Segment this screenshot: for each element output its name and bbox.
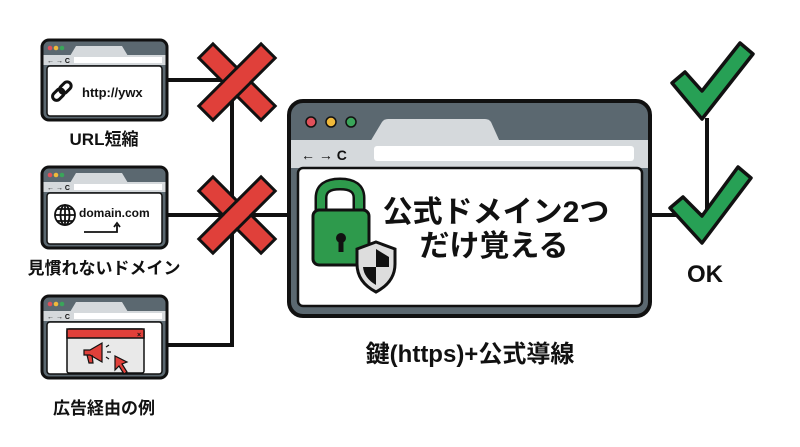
panel: main browser	[289, 101, 650, 316]
label: URL短縮: URL短縮	[70, 130, 138, 149]
panel: main browser: ← → C	[301, 147, 347, 163]
label: OK: OK	[687, 261, 724, 288]
icon: red X middle	[175, 153, 299, 277]
panel: ad browser: ← → C	[47, 314, 70, 321]
panel: main browser: だけ覚える	[419, 230, 569, 263]
icon: ad popup: ×	[137, 332, 141, 339]
text: 公式ドメイン2つだけ覚える: 公式ドメイン2つ	[383, 196, 609, 229]
panel: ad browser	[42, 296, 167, 378]
connector lines	[167, 80, 707, 345]
label: 見慣れないドメイン: 見慣れないドメイン	[28, 259, 180, 278]
icon: link	[51, 80, 73, 102]
panel: URL shortener browser: ← → C	[47, 58, 70, 65]
panel: unfamiliar domain browser	[42, 167, 167, 248]
text: domain.com: domain.com	[79, 206, 150, 220]
icon: red X top	[175, 20, 299, 144]
label: 広告経由の例: 広告経由の例	[53, 399, 155, 418]
label: 鍵(https)+公式導線: 鍵(https)+公式導線	[366, 341, 574, 368]
icon: padlock with shield	[313, 184, 395, 292]
panel: URL shortener browser	[42, 40, 167, 120]
panel: unfamiliar domain browser: ← → C	[47, 185, 70, 192]
icon: green check top	[672, 43, 753, 119]
text: http://ywx: http://ywx	[82, 85, 143, 100]
icon: globe	[55, 205, 75, 225]
icon: green check bottom	[670, 167, 751, 243]
